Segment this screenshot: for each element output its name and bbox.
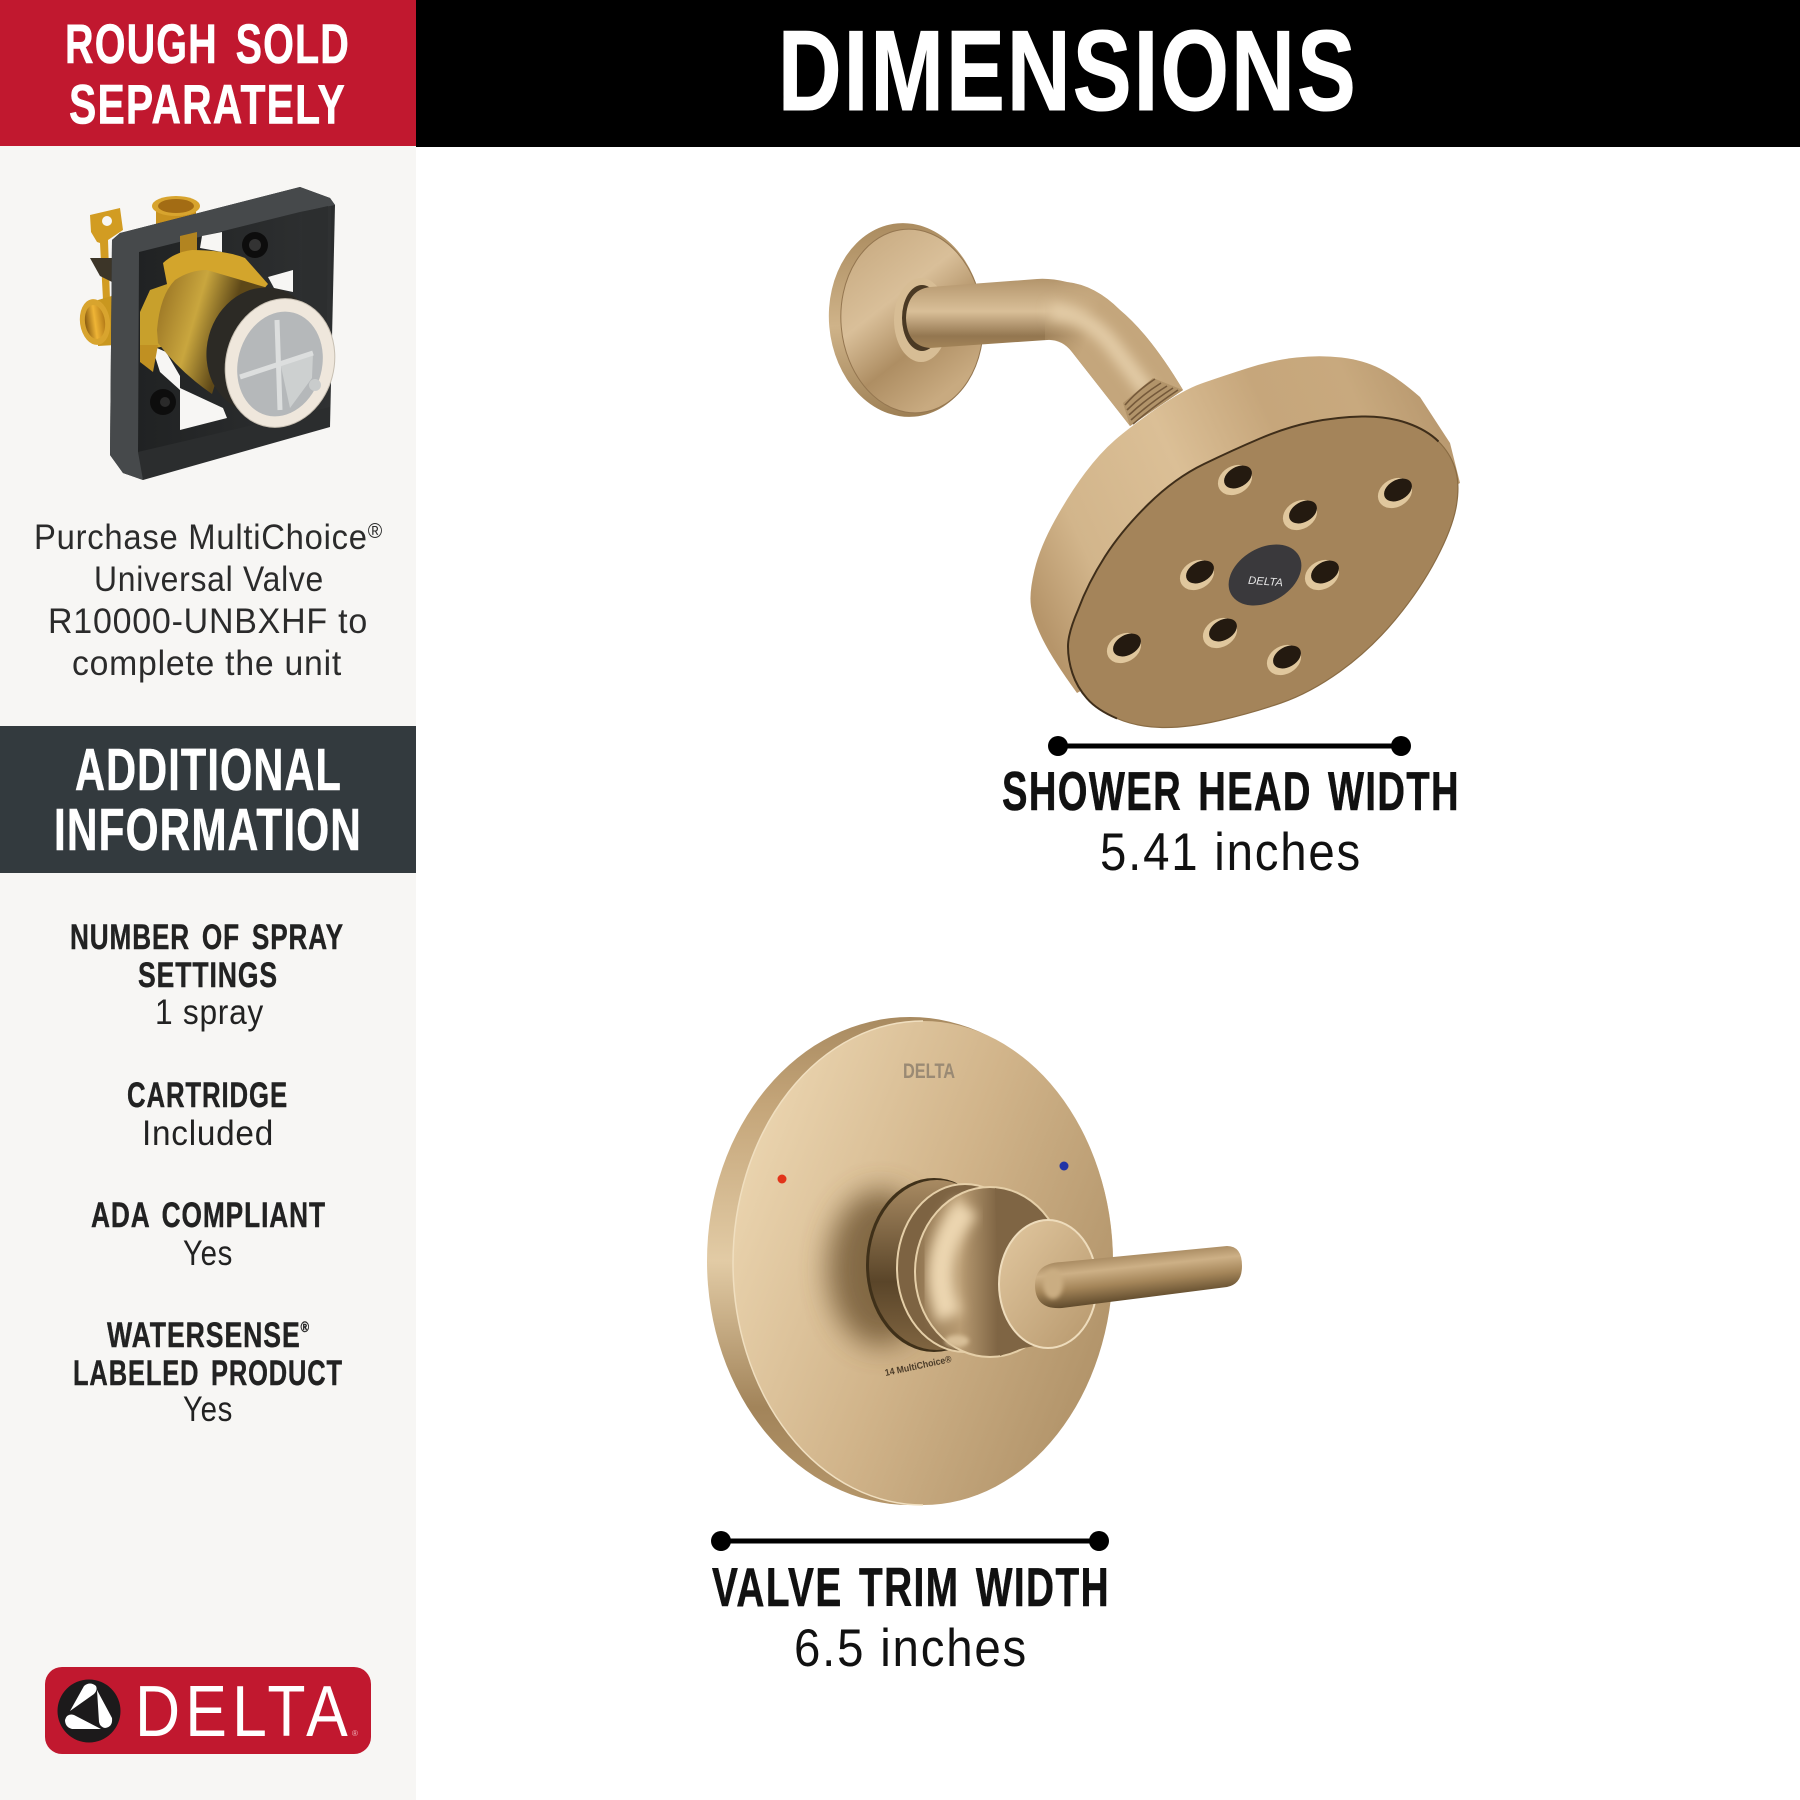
logo: delta xyxy=(45,1667,371,1754)
heading: additional information xyxy=(0,726,416,873)
panel: left sidebar xyxy=(0,0,416,1800)
spec: spray settings xyxy=(70,918,344,1032)
shower arm xyxy=(906,279,1183,426)
dimension line: shower head xyxy=(1048,736,1411,756)
trim plate xyxy=(707,1017,1113,1505)
spec: ada compliant: ADA COMPLIANT xyxy=(91,1196,326,1235)
head face xyxy=(1068,416,1458,728)
brass body xyxy=(180,232,197,258)
banner: rough sold separately: SEPARATELY xyxy=(69,72,346,136)
collar xyxy=(894,278,948,362)
flange xyxy=(821,217,991,423)
spec: cartridge: Included xyxy=(142,1114,274,1153)
handle cap xyxy=(999,1220,1097,1348)
logo: delta: ® xyxy=(352,1729,358,1738)
spec: cartridge: CARTRIDGE xyxy=(127,1076,288,1115)
heading: additional information: ADDITIONAL xyxy=(75,737,342,803)
head body xyxy=(1030,356,1460,693)
dimension line: valve trim xyxy=(711,1531,1109,1551)
spec: ada compliant xyxy=(91,1196,326,1273)
spec: watersense: WATERSENSE xyxy=(107,1316,361,1355)
hub shadow xyxy=(828,1190,932,1346)
banner: dimensions title: DIMENSIONS xyxy=(778,8,1358,135)
text: purchase note: Universal Valve xyxy=(94,560,324,599)
label: valve trim width xyxy=(712,1556,1110,1678)
text: purchase note xyxy=(34,518,383,683)
spec: watersense xyxy=(73,1316,343,1429)
label: shower head width xyxy=(1002,760,1460,882)
label: shower head width: 5.41 inches xyxy=(1100,823,1362,882)
logo: delta: DELTA xyxy=(135,1672,353,1752)
label: valve trim width: VALVE TRIM WIDTH xyxy=(712,1556,1110,1618)
label: valve trim width: 6.5 inches xyxy=(794,1619,1028,1678)
multichoice marking: 14 MultiChoice® xyxy=(884,1354,953,1379)
brand mark on plate: DELTA xyxy=(903,1060,955,1083)
banner: rough sold separately xyxy=(0,0,416,146)
spec: cartridge xyxy=(127,1076,288,1153)
image: rough-in valve xyxy=(77,187,349,480)
handle hub xyxy=(866,1178,1097,1357)
center badge xyxy=(1218,532,1312,618)
spec: spray settings: 1 spray xyxy=(155,993,264,1032)
label: shower head width: SHOWER HEAD WIDTH xyxy=(1002,760,1460,822)
hot indicator xyxy=(778,1174,786,1184)
spec: watersense: LABELED PRODUCT xyxy=(73,1354,343,1393)
spray nozzles xyxy=(1101,459,1418,681)
lever xyxy=(1035,1246,1242,1308)
windows xyxy=(200,232,222,252)
spec: watersense: ® xyxy=(301,1319,310,1336)
screws xyxy=(242,232,268,258)
spec: spray settings: SETTINGS xyxy=(138,956,278,995)
image: shower head xyxy=(821,217,1460,728)
spec: watersense: Yes xyxy=(183,1390,233,1429)
cold indicator xyxy=(1060,1162,1068,1170)
banner: rough sold separately: ROUGH SOLD xyxy=(65,12,350,75)
text: purchase note: complete the unit xyxy=(72,644,342,683)
frame xyxy=(110,187,335,480)
face edge line xyxy=(1068,416,1438,718)
image: valve trim xyxy=(707,1017,1242,1505)
banner: dimensions title xyxy=(416,0,1800,147)
spec: spray settings: NUMBER OF SPRAY xyxy=(70,918,344,957)
spec: ada compliant: Yes xyxy=(183,1234,233,1273)
text: purchase note: R10000-UNBXHF to xyxy=(48,602,368,641)
text: purchase note: Purchase MultiChoice xyxy=(34,518,390,557)
heading: additional information: INFORMATION xyxy=(54,797,362,863)
arm thread xyxy=(1123,378,1183,426)
center badge: DELTA xyxy=(1248,575,1283,589)
text: purchase note: ® xyxy=(368,520,383,543)
